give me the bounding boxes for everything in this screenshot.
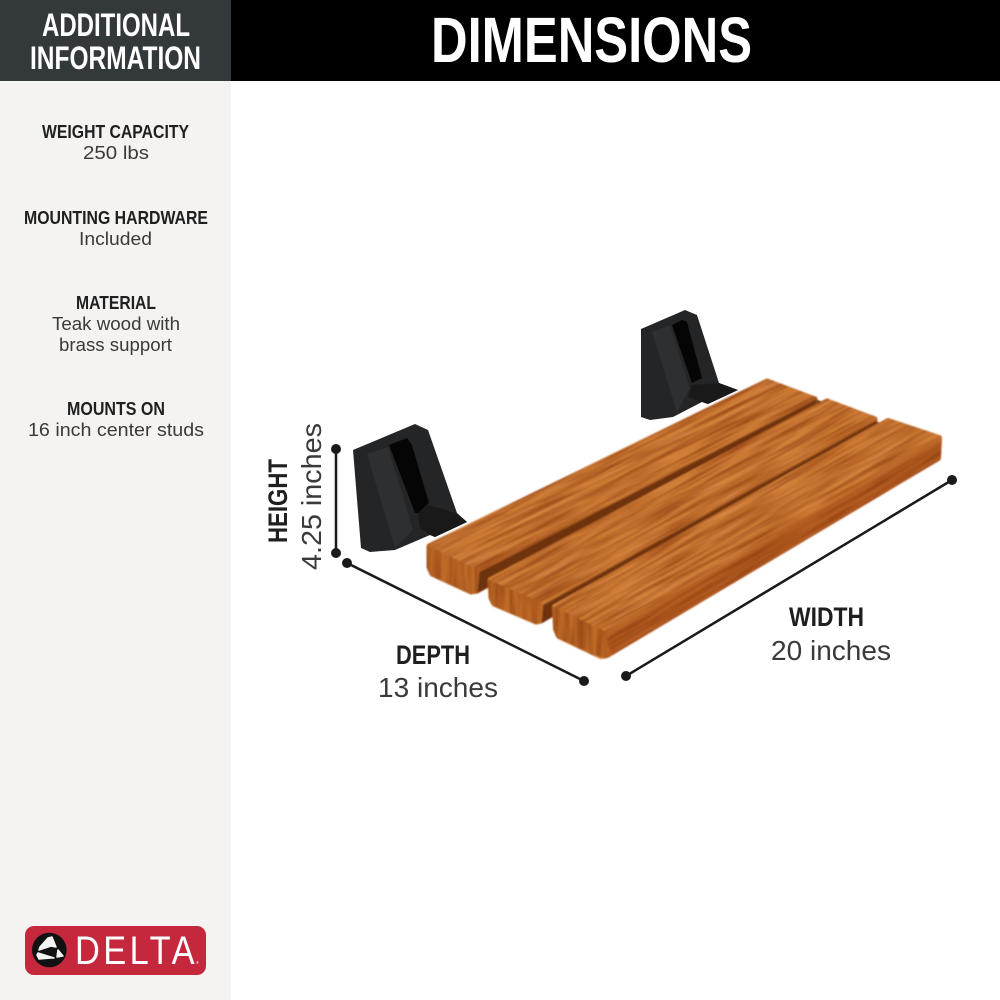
slat 3 [551,417,944,660]
sidebar background [0,81,231,1000]
slat 2 [486,398,879,626]
depth label [378,640,498,703]
depth label: DEPTH [396,640,470,670]
height label: 4.25 inches [296,423,327,570]
depth dimension line [342,558,589,686]
dark gap between middle and front slats [545,422,888,632]
header: additional information: INFORMATION [30,40,201,76]
spec: mounts on [28,398,204,440]
spec: mounts on: 16 inch center studs [28,419,204,440]
depth label: 13 inches [378,672,498,703]
teak seat [425,378,944,660]
spec: weight capacity: 250 lbs [83,142,149,163]
width label: 20 inches [771,635,891,666]
spec: material: brass support [59,334,172,355]
width dimension line [621,475,957,681]
height label [263,423,327,570]
header: additional information [0,0,231,81]
right wall bracket [641,310,738,420]
height label: HEIGHT [263,459,293,543]
spec: mounts on: MOUNTS ON [67,398,165,419]
spec: weight capacity: WEIGHT CAPACITY [42,121,190,142]
delta logo: DELTA [75,928,198,973]
header: dimensions title: DIMENSIONS [431,4,752,76]
spec: material: Teak wood with [52,313,180,334]
spec: mounting hardware [24,207,208,249]
delta logo [25,926,206,975]
header: additional information: ADDITIONAL [42,7,190,43]
height dimension line [331,444,341,558]
dark gaps under slats [479,400,827,605]
slat 1 [425,378,818,596]
spec: mounting hardware: MOUNTING HARDWARE [24,207,208,228]
width label: WIDTH [789,602,864,632]
width label [771,602,891,666]
header: dimensions title [231,0,1000,81]
spec: weight capacity [42,121,190,163]
delta logo: ® [196,960,199,965]
spec: mounting hardware: Included [79,228,152,249]
spec: material: MATERIAL [76,292,156,313]
left wall bracket [353,424,467,552]
spec: material [52,292,180,355]
